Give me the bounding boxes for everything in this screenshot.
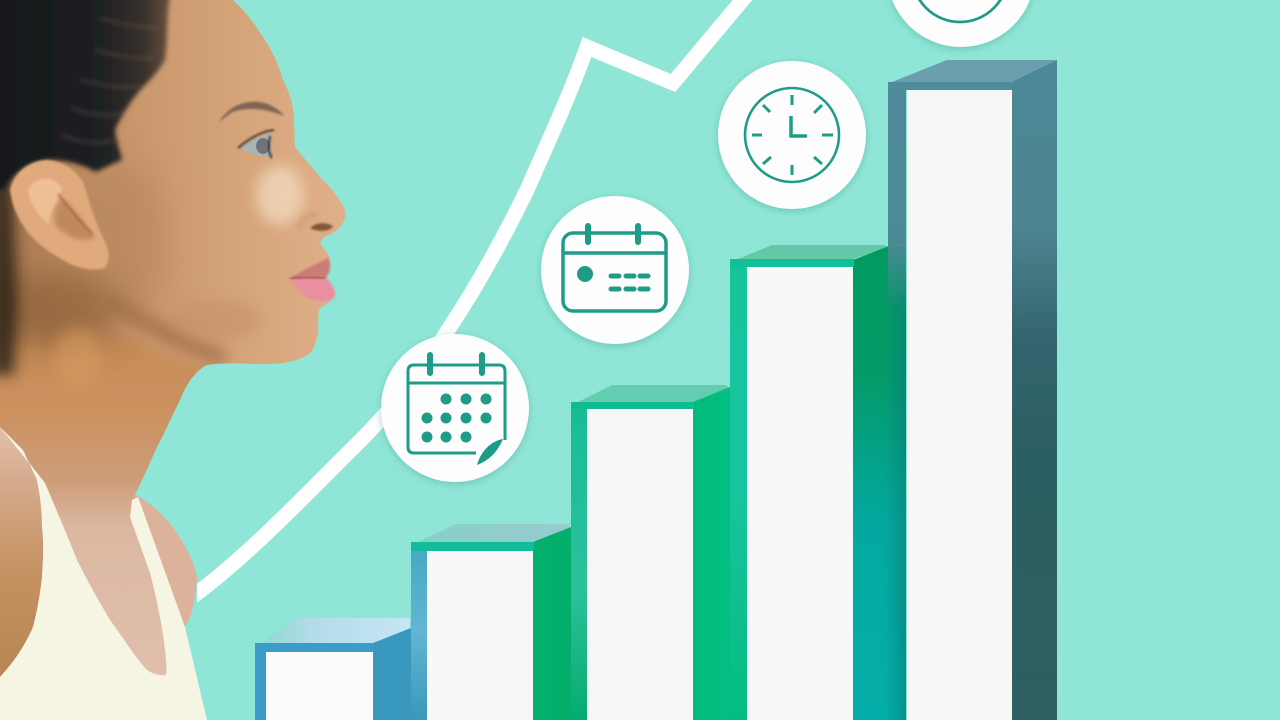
right shoulder — [136, 495, 197, 628]
eyebrow — [219, 102, 284, 122]
tank top — [0, 427, 207, 720]
white growth line — [188, 0, 755, 600]
badge: weekly calendar — [541, 196, 689, 344]
eye — [238, 130, 274, 158]
nostril — [310, 223, 333, 231]
lips — [290, 258, 335, 301]
nose wing shading — [297, 214, 318, 228]
bar 3 — [571, 385, 747, 720]
icon: cropped dial — [912, 0, 1008, 22]
left arm — [0, 427, 43, 677]
bar 4 — [730, 245, 906, 720]
icon: clock — [745, 88, 839, 182]
bar 5 — [888, 60, 1057, 720]
bar 1 — [255, 618, 427, 720]
bar 2 — [411, 524, 587, 720]
badge: top clock, cropped — [887, 0, 1035, 47]
badge: clock — [718, 61, 866, 209]
ear — [10, 160, 109, 270]
hair — [0, 0, 170, 190]
badge: monthly calendar — [381, 334, 529, 482]
head, neck and chest — [0, 0, 360, 720]
person in profile — [0, 0, 360, 720]
icon: monthly calendar — [408, 355, 505, 465]
icon: weekly calendar — [563, 226, 666, 311]
bar chart — [255, 60, 1057, 720]
